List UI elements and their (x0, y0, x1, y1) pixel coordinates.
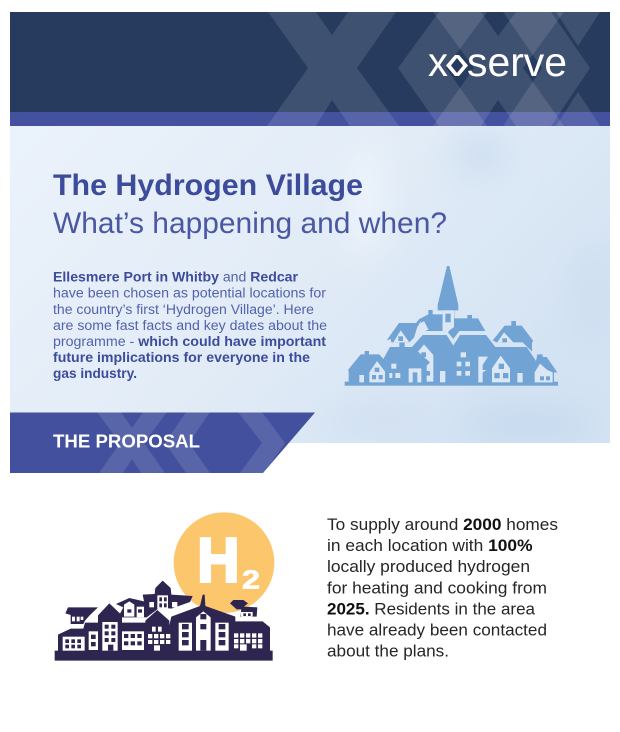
proposal text: about the plans. (327, 643, 449, 661)
icon: hydrogen village (55, 512, 274, 661)
building windows (65, 597, 251, 651)
title: The Hydrogen Village (53, 169, 363, 202)
building walls (63, 595, 262, 651)
icon: H2 circle: 2 (242, 564, 260, 594)
icon: blue village (345, 266, 558, 386)
proposal text: in each location with 100% (327, 537, 533, 555)
icon: H2 circle (174, 512, 274, 613)
panel: intro background (10, 126, 620, 447)
intro paragraph: are some fast facts and key dates about the (53, 318, 327, 333)
proposal text: To supply around 2000 homes (327, 516, 558, 534)
intro paragraph: programme - which could have important (53, 334, 327, 349)
proposal text: for heating and cooking from (327, 579, 547, 597)
logo: xoserve: x (428, 39, 448, 85)
proposal text: 2025. Residents in the area (327, 600, 536, 618)
intro paragraph: gas industry. (53, 366, 137, 381)
intro paragraph: have been chosen as potential locations for (53, 286, 327, 301)
icon: H2 circle: H (197, 527, 239, 596)
village windows and walls (359, 310, 553, 382)
logo: xoserve: serve (467, 39, 567, 85)
proposal text: locally produced hydrogen (327, 558, 530, 576)
intro paragraph: Ellesmere Port in Whitby and Redcar (53, 270, 299, 284)
proposal text (327, 516, 558, 661)
proposal text: have already been contacted (327, 622, 547, 640)
intro paragraph: the country’s first ‘Hydrogen Village’. Here (53, 302, 314, 317)
village silhouette (55, 581, 273, 661)
banner label: THE PROPOSAL (53, 431, 200, 452)
intro paragraph (53, 270, 327, 381)
banner: the proposal (10, 412, 315, 473)
panel: header banner (10, 12, 610, 126)
subtitle: What’s happening and when? (53, 207, 447, 240)
intro paragraph: future implications for everyone in the (53, 350, 310, 365)
purple band (10, 112, 610, 126)
background X pattern (267, 12, 600, 126)
